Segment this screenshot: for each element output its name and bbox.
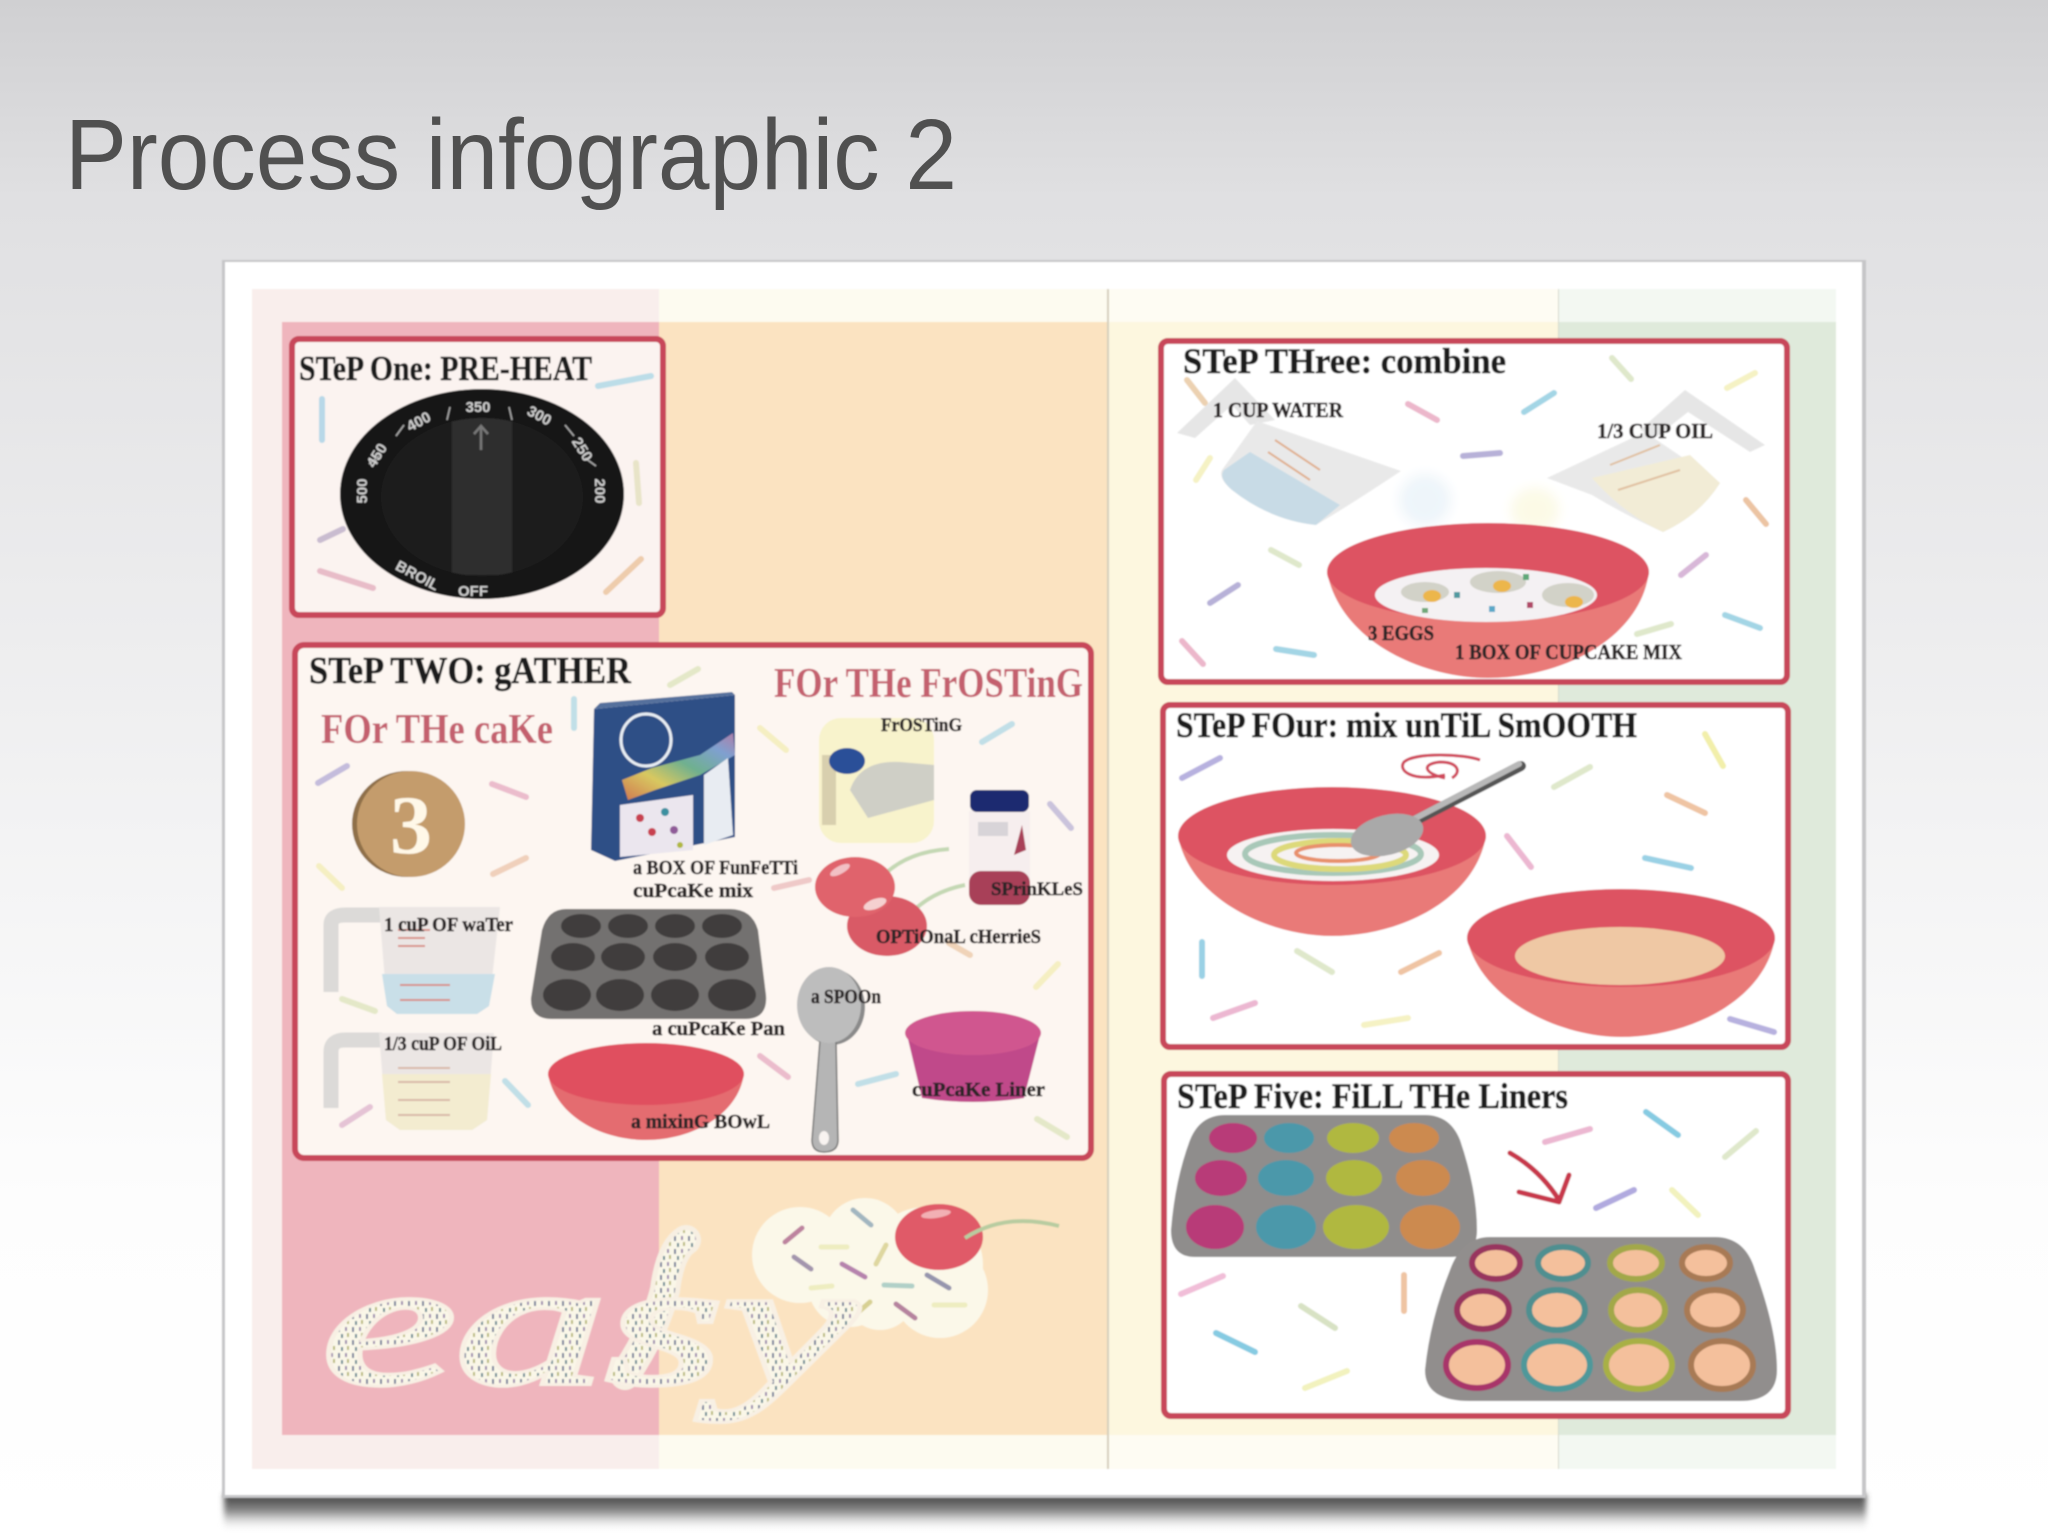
oven temperature dial: 300 [524, 403, 554, 429]
icon: cherries [815, 849, 965, 956]
heading: step two: STeP TWO: gATHER [309, 650, 631, 692]
label: one cup of water: 1 cuP OF waTer [384, 914, 513, 936]
label: frosting: FrOSTinG [881, 715, 962, 736]
icon: number three coin: 3 [390, 779, 432, 872]
card drop shadow [224, 1494, 1866, 1532]
panel: step three combine [1161, 341, 1787, 682]
panel: step two gather [295, 645, 1091, 1158]
label: cupcake liner: cuPcaKe Liner [912, 1079, 1045, 1101]
label: one cup water: 1 CUP WATER [1213, 398, 1344, 422]
icon: cupcake liner [905, 1011, 1041, 1102]
oven temperature dial: 250 [568, 434, 596, 465]
label: box of funfetti: a BOX OF FunFeTTi [633, 857, 798, 879]
page background colour columns [252, 289, 1836, 1469]
label: one box of cupcake mix: 1 BOX OF CUPCAKE MIX [1455, 640, 1682, 664]
panel: step four mix until smooth [1163, 705, 1788, 1047]
sprinkles: step two [318, 669, 1071, 1137]
label: cupcake pan: a cuPcaKe Pan [652, 1018, 785, 1040]
slide title: Process infographic 2 [65, 99, 957, 211]
heading: step one: STeP One: PRE-HEAT [299, 349, 592, 388]
oven temperature dial: 400 [404, 409, 434, 435]
sprinkles: step four [1182, 734, 1774, 1032]
icon: cupcake pan [531, 909, 766, 1019]
oven temperature dial: 200 [591, 478, 608, 504]
oven temperature dial: 500 [354, 478, 371, 504]
label: sprinkles: SPrinKLeS [991, 879, 1083, 900]
icon: spoon [797, 967, 865, 1152]
icon: pan with coloured liners [1171, 1115, 1477, 1257]
icon: number three coin [352, 771, 465, 877]
label: cupcake mix: cuPcaKe mix [633, 880, 753, 902]
oven temperature dial: BROIL [393, 558, 442, 594]
icon: mixing bowl [548, 1043, 744, 1140]
icon: water measuring cup [331, 907, 500, 1014]
oven temperature dial: OFF [458, 583, 488, 600]
sprinkles: step five [1181, 1112, 1756, 1388]
sprinkles: step one [320, 376, 651, 592]
heading: step four: STeP FOur: mix unTiL SmOOTH [1176, 705, 1637, 745]
icon: frosting tub [819, 718, 934, 843]
heading: step three: STeP THree: combine [1183, 341, 1506, 381]
icon: bowl with ingredients [1327, 523, 1649, 678]
panel: step one pre-heat [292, 339, 663, 615]
decorative word: easy: easy [322, 1227, 858, 1422]
icon: bowl being mixed [1178, 764, 1521, 936]
icon: pouring oil cup [1511, 390, 1765, 532]
icon: sprinkles jar [969, 790, 1030, 905]
icon: oil measuring cup [331, 1033, 494, 1130]
label: mixing bowl: a mixinG BOwL [631, 1111, 770, 1133]
subheading: for the cake: FOr THe caKe [321, 707, 553, 753]
panel: step five fill the liners [1164, 1074, 1788, 1416]
icon: pan with batter-filled liners [1425, 1237, 1777, 1401]
label: one third cup of oil: 1/3 cuP OF OiL [384, 1033, 502, 1055]
infographic card [222, 260, 1866, 1498]
label: three eggs: 3 EGGS [1368, 621, 1434, 645]
icon: bowl of smooth batter [1467, 889, 1775, 1037]
sprinkles on frosting [785, 1210, 965, 1318]
oven temperature dial: 350 [465, 399, 491, 416]
arrow: pour into pan [1510, 1153, 1569, 1202]
decorative word: easy [322, 1227, 858, 1422]
illustration: frosting swirl with cherry [752, 1198, 1059, 1338]
heading: step five: STeP Five: FiLL THe Liners [1177, 1076, 1568, 1116]
label: optional cherries: OPTiOnaL cHerrieS [876, 926, 1041, 948]
icon: cupcake mix box [591, 692, 735, 861]
oven temperature dial [340, 389, 624, 600]
label: one third cup oil: 1/3 CUP OIL [1597, 419, 1713, 443]
sprinkles: step three [1182, 358, 1766, 664]
cherry [895, 1204, 1059, 1270]
icon: spiral stirring mark [1403, 755, 1480, 778]
oven temperature dial: 450 [363, 440, 391, 471]
subheading: for the frosting: FOr THe FrOSTinG [774, 661, 1083, 707]
icon: pouring water cup [1177, 378, 1451, 526]
label: spoon: a SPOOn [811, 986, 881, 1008]
